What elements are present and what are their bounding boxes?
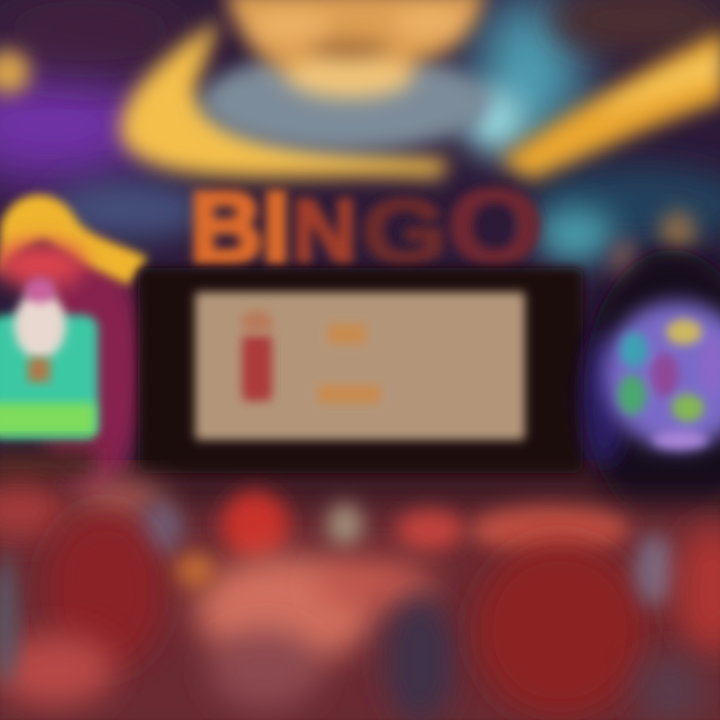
machine screen [0, 315, 98, 440]
background [0, 0, 720, 505]
golden face [225, 0, 485, 98]
person: centre [221, 491, 289, 559]
bingo title (blurred): N [292, 182, 357, 282]
board panel [195, 292, 525, 440]
ceiling crescent: yellow glow [0, 20, 450, 178]
board orange marks [318, 324, 380, 403]
board red figure [242, 335, 272, 401]
bingo title (blurred): O [448, 169, 542, 285]
grey-blue dome [200, 52, 490, 152]
board figure head [241, 310, 273, 334]
right golden streak [500, 30, 720, 180]
prize wheel [583, 250, 720, 530]
bingo board [138, 268, 583, 473]
wheel segments [618, 319, 720, 449]
bingo title (blurred) [186, 182, 546, 270]
machine arch [0, 195, 148, 285]
bingo title (blurred): BI [190, 172, 290, 284]
person: right [470, 506, 630, 554]
crowd [0, 480, 720, 720]
left slot machine [0, 195, 148, 495]
bingo title (blurred): G [362, 182, 447, 282]
board frame [138, 268, 583, 473]
person: left [45, 510, 165, 670]
